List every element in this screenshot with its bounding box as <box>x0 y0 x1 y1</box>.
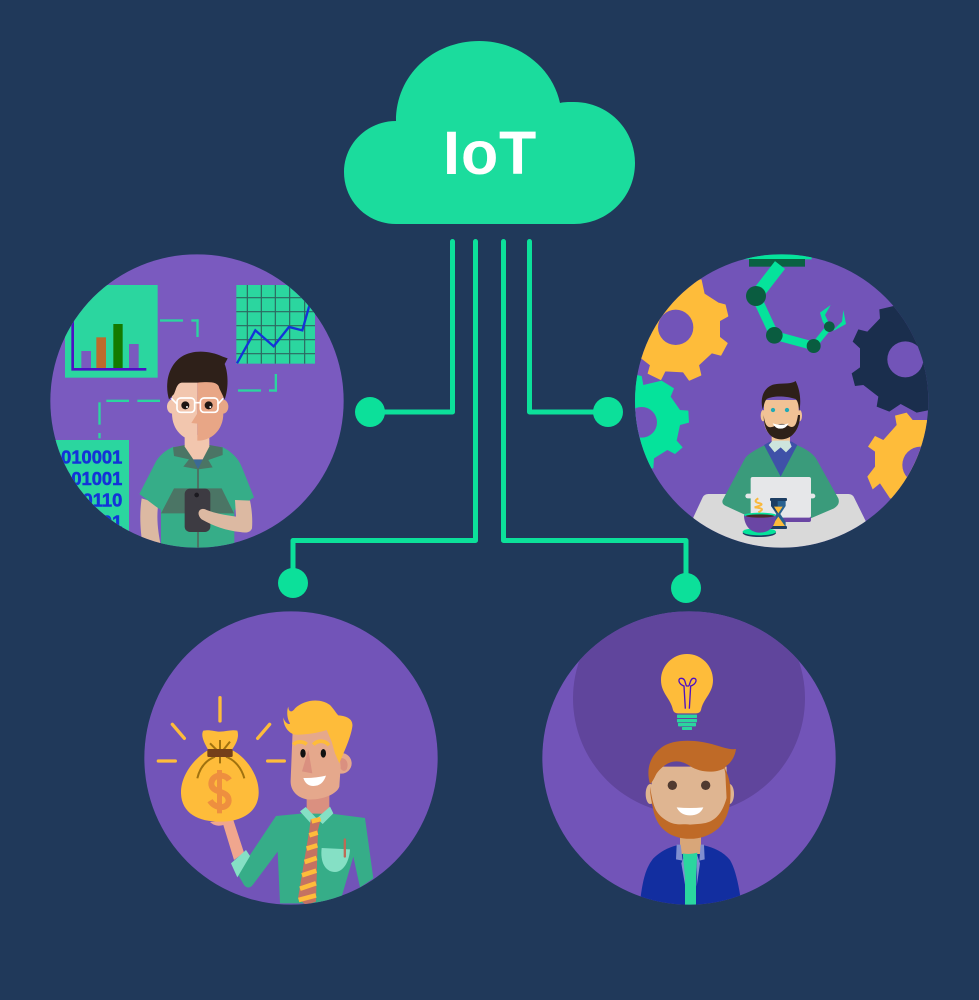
person: engineer <box>722 381 839 519</box>
money bag <box>181 730 259 822</box>
arm and shirt <box>210 795 373 903</box>
connector: to business circle <box>278 242 476 598</box>
person: analyst <box>139 352 254 550</box>
connector: to engineer circle <box>530 242 623 427</box>
panel: engineer at laptop <box>626 250 939 550</box>
gear: yellow top <box>630 280 728 380</box>
striped tie <box>298 819 321 905</box>
gear: yellow bottom <box>867 412 928 498</box>
dollar sign <box>210 776 229 807</box>
hourglass <box>770 498 787 529</box>
light bulb <box>661 654 713 730</box>
panel: man with light bulb idea <box>542 611 836 905</box>
coffee cup <box>743 498 776 537</box>
binary data panel <box>56 440 129 531</box>
line chart <box>236 285 315 364</box>
laptop <box>745 477 815 522</box>
phone <box>185 489 210 532</box>
binary data panel: 001001 <box>61 468 122 489</box>
robot arm <box>743 254 846 353</box>
gear: green <box>635 375 689 468</box>
gear: navy <box>852 306 930 413</box>
cloud with IoT title <box>344 41 635 224</box>
binary data panel: 010001 <box>61 446 122 467</box>
thought spotlight <box>573 611 805 808</box>
panel: businessman with money bag <box>140 610 440 910</box>
desk <box>693 494 866 550</box>
glasses <box>171 398 223 412</box>
shine rays <box>158 698 284 761</box>
binary data panel: 000110 <box>62 490 122 511</box>
panel: data analyst with phone <box>50 250 350 550</box>
connector: to data analyst circle <box>355 242 452 427</box>
binary data panel: 000001 <box>61 511 122 532</box>
head <box>283 700 352 800</box>
connector: to idea circle <box>504 242 701 603</box>
bar chart <box>65 285 158 378</box>
dashed connectors <box>98 319 277 438</box>
person: bearded man <box>641 741 740 910</box>
title: IoT: IoT <box>443 119 536 187</box>
